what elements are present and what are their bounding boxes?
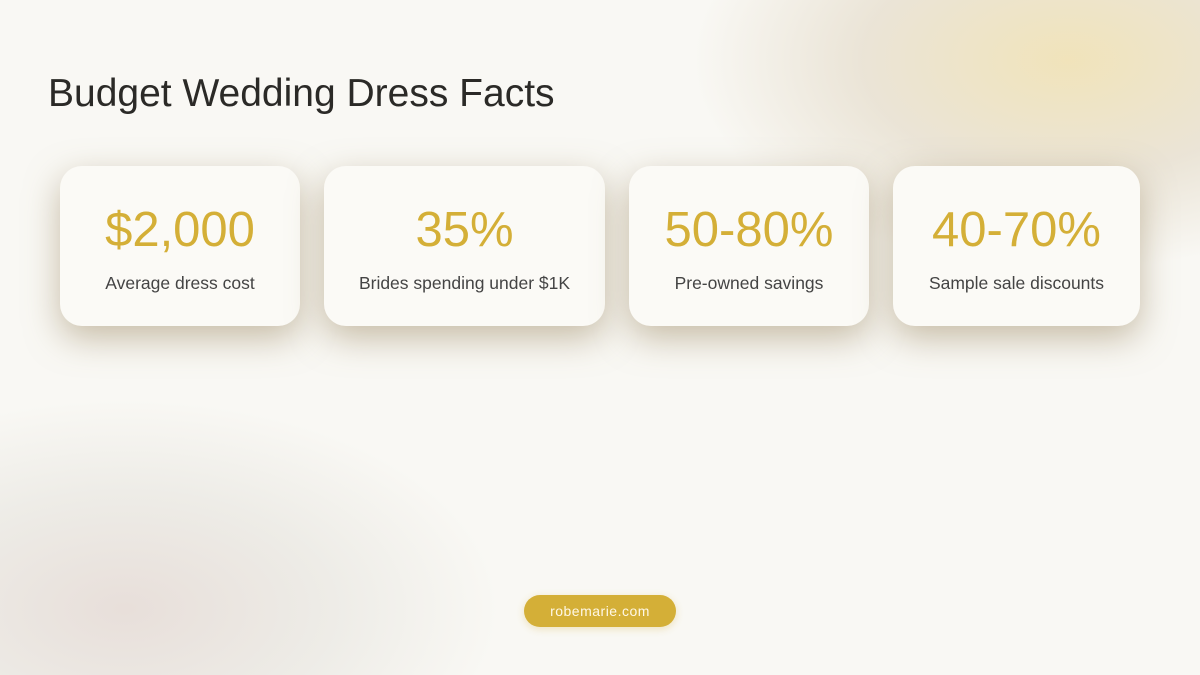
stat: 50-80%: 50-80% [665,203,833,257]
stat: $2,000: $2,000 [105,203,255,257]
label: brides spending under $1K: Brides spending under $1K [359,273,570,293]
card: sample sale discounts [893,166,1140,326]
card: pre-owned savings [629,166,869,326]
stat: 40-70%: 40-70% [932,203,1101,257]
label: sample sale discounts: Sample sale discounts [929,273,1104,293]
footer pill: robemarie.com [524,595,676,627]
label: pre-owned savings: Pre-owned savings [675,273,823,293]
label: average dress cost: Average dress cost [105,273,255,293]
footer pill: robemarie.com: robemarie.com [550,603,650,619]
card: brides under $1K [324,166,605,326]
card: average dress cost [60,166,300,326]
title: Budget Wedding Dress Facts [48,72,555,115]
stat: 35%: 35% [415,203,514,257]
